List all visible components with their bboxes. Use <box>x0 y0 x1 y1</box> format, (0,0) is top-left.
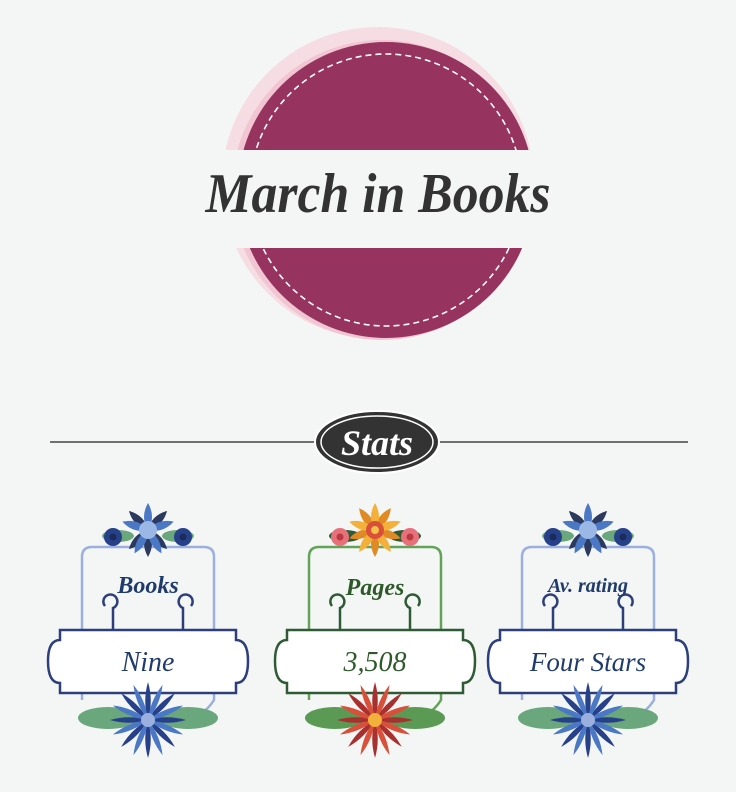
icon: top flower <box>102 503 194 557</box>
icon: bottom flower <box>110 682 186 758</box>
value: Four Stars <box>529 647 646 677</box>
panel: books <box>48 503 248 758</box>
value: Nine <box>121 647 174 678</box>
icon: bottom flower <box>337 682 413 758</box>
label: Av. rating <box>546 575 628 597</box>
icon: top flower <box>329 503 421 557</box>
title badge <box>203 27 550 340</box>
stats divider <box>50 411 688 473</box>
value: 3,508 <box>342 647 406 678</box>
icon: top flower <box>542 503 634 557</box>
label: Pages <box>345 575 404 601</box>
panel: pages <box>275 503 475 758</box>
title text: March in Books <box>205 163 550 225</box>
icon: bottom flower <box>550 682 626 758</box>
label: Books <box>116 573 179 599</box>
panel: average rating <box>488 503 688 758</box>
stats heading: Stats <box>341 423 413 463</box>
